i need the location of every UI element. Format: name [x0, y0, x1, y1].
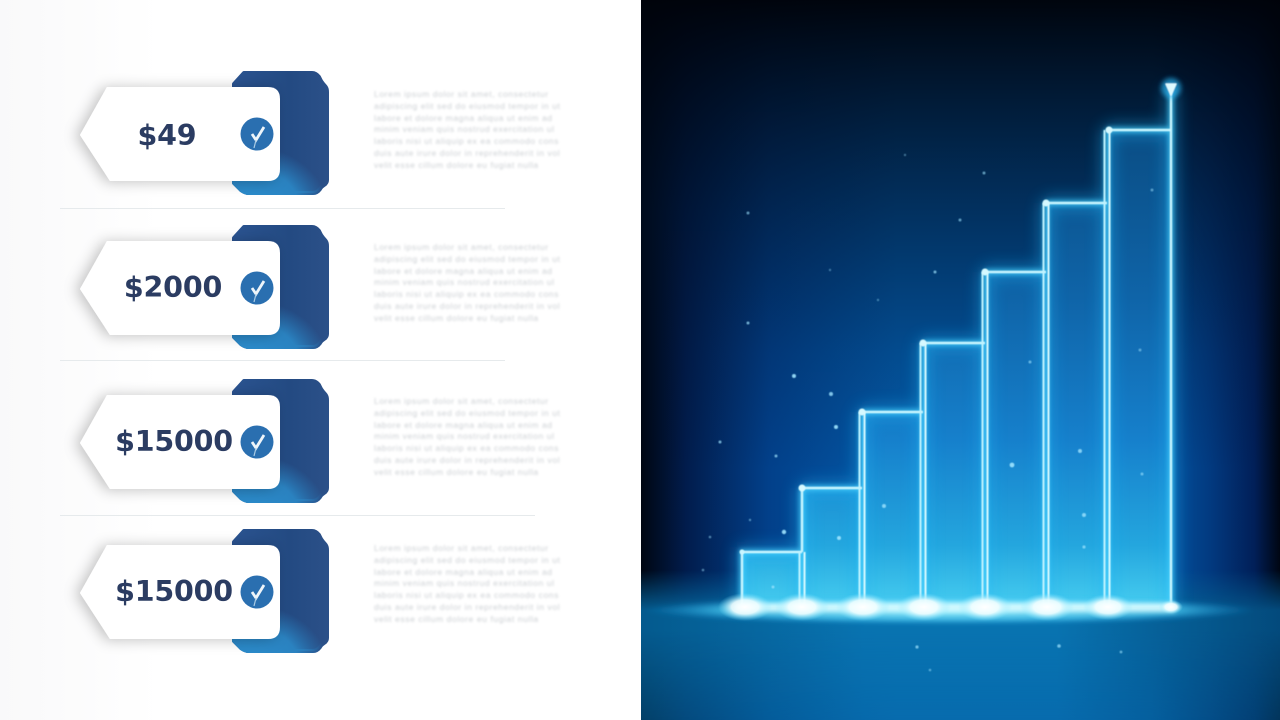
text block 4: minim veniam quis nostrud exercitation ul — [374, 578, 555, 588]
tag 1 — [80, 73, 327, 193]
price: $15000 row 4: $15000 — [115, 575, 233, 608]
text block 3: adipiscing elit sed do eiusmod tempor in ut — [374, 408, 560, 418]
price: $2000: $2000 — [124, 271, 222, 304]
text block 3: laboris nisi ut aliquip ex ea commodo cons — [374, 443, 559, 453]
bars — [742, 130, 1171, 607]
text block 3: duis aute irure dolor in reprehenderit in vol — [374, 455, 560, 465]
glowing outlines — [742, 88, 1171, 607]
floor glow line — [645, 593, 1255, 624]
text block 4: Lorem ipsum dolor sit amet, consectetur — [374, 543, 549, 553]
text block 1: minim veniam quis nostrud exercitation ul — [374, 124, 555, 134]
text block 1: laboris nisi ut aliquip ex ea commodo cons — [374, 136, 559, 146]
text block 2: labore et dolore magna aliqua ut enim ad — [374, 266, 553, 276]
text block 4: velit esse cillum dolore eu fugiat nulla — [374, 614, 539, 624]
text block 4: laboris nisi ut aliquip ex ea commodo cons — [374, 590, 559, 600]
text block 1: duis aute irure dolor in reprehenderit in vol — [374, 148, 560, 158]
tag 2 — [80, 227, 327, 347]
panel: glowing bar chart — [641, 0, 1280, 720]
chart background — [641, 0, 1280, 720]
sparkle particles — [702, 154, 1154, 671]
text block 1 — [374, 89, 560, 170]
text block 2: laboris nisi ut aliquip ex ea commodo cons — [374, 289, 559, 299]
text block 2: Lorem ipsum dolor sit amet, consectetur — [374, 242, 549, 252]
text block 4 — [374, 543, 560, 624]
text block 3: Lorem ipsum dolor sit amet, consectetur — [374, 396, 549, 406]
text block 4: adipiscing elit sed do eiusmod tempor in ut — [374, 555, 560, 565]
text block 2 — [374, 242, 560, 323]
text block 3: labore et dolore magna aliqua ut enim ad — [374, 420, 553, 430]
text block 2: adipiscing elit sed do eiusmod tempor in ut — [374, 254, 560, 264]
price: $15000 row 3: $15000 — [115, 425, 233, 458]
tag 3 — [80, 381, 327, 501]
tag 4 — [80, 531, 327, 651]
text block 4: labore et dolore magna aliqua ut enim ad — [374, 567, 553, 577]
text block 2: duis aute irure dolor in reprehenderit in vol — [374, 301, 560, 311]
text block 1: Lorem ipsum dolor sit amet, consectetur — [374, 89, 549, 99]
text block 1: labore et dolore magna aliqua ut enim ad — [374, 113, 553, 123]
price: $49: $49 — [138, 119, 196, 152]
text block 3: velit esse cillum dolore eu fugiat nulla — [374, 467, 539, 477]
text block 3 — [374, 396, 560, 477]
text block 3: minim veniam quis nostrud exercitation ul — [374, 431, 555, 441]
text block 4: duis aute irure dolor in reprehenderit in vol — [374, 602, 560, 612]
panel: pricing list — [0, 0, 641, 720]
pricing tags graphic — [72, 71, 329, 653]
corner glints and top arrow point — [740, 78, 1181, 554]
text block 2: velit esse cillum dolore eu fugiat nulla — [374, 313, 539, 323]
text block 2: minim veniam quis nostrud exercitation ul — [374, 277, 555, 287]
text block 1: adipiscing elit sed do eiusmod tempor in ut — [374, 101, 560, 111]
text block 1: velit esse cillum dolore eu fugiat nulla — [374, 160, 539, 170]
